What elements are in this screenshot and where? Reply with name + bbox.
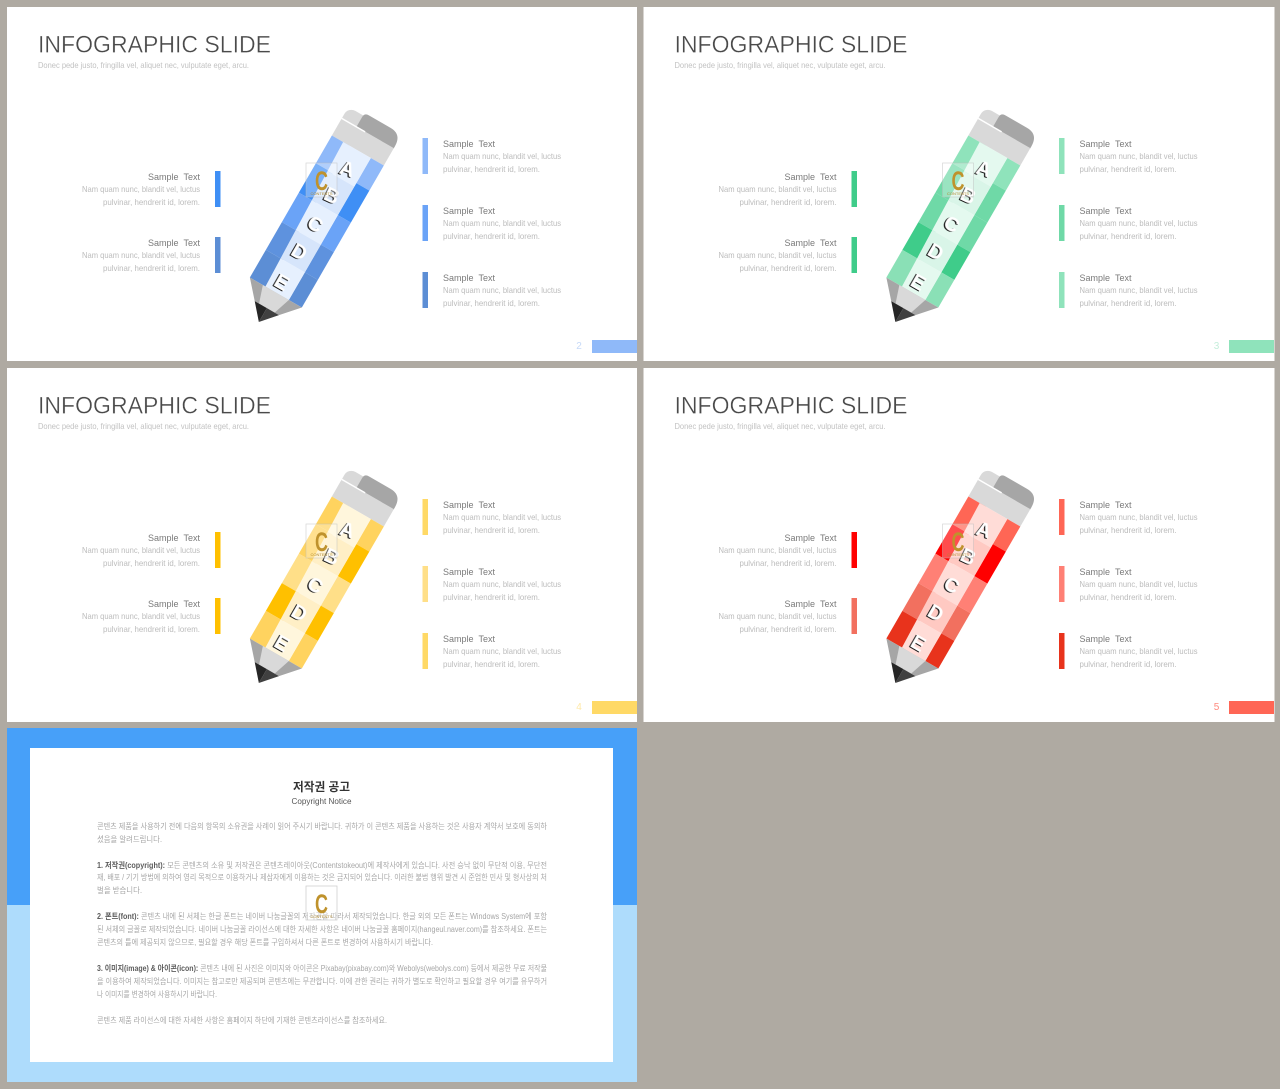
- left item 1: Nam quam nunc, blandit vel, luctus: [82, 545, 200, 555]
- right item 1: [422, 499, 561, 535]
- section 2 text: 2. 폰트(font): 콘텐츠 내에 된 서체는 한글 폰트는 네이버 나눔글꼴의 저작권을 따라서 제작되었습니다. 한글 외의 모든 폰트는 Windows System에 포함: [97, 911, 548, 921]
- right item 3: Nam quam nunc, blandit vel, luctus: [443, 285, 561, 295]
- right item 3: Sample Text: [443, 273, 495, 284]
- right item 3: [422, 272, 561, 308]
- left item 1: [718, 171, 857, 207]
- watermark logo: [306, 163, 337, 197]
- letters: D: [287, 240, 311, 266]
- section 1 text: 재, 배포 / 기기 방법에 의하여 영리 목적으로 이용하거나 제삼자에게 이용하는 것은 금지되어 있습니다. 이러한 불법 행위 발견 시 준엄한 민사 및 형사상의 처: [97, 872, 547, 882]
- left item 2: Nam quam nunc, blandit vel, luctus: [718, 250, 836, 260]
- right item 1: [1059, 138, 1198, 174]
- panel: copyright notice: [7, 728, 637, 1082]
- subheading: Copyright Notice: [292, 796, 352, 806]
- watermark logo: [942, 163, 974, 197]
- right item 2: pulvinar, hendrerit id, lorem.: [1080, 592, 1176, 602]
- left item 2: Sample Text: [148, 238, 200, 249]
- right item 2: Sample Text: [443, 206, 495, 217]
- panel: yellow slide: [7, 368, 637, 722]
- watermark logo: [306, 524, 337, 558]
- letters: [904, 515, 998, 658]
- right item 1: Nam quam nunc, blandit vel, luctus: [1080, 151, 1198, 161]
- left item 1: pulvinar, hendrerit id, lorem.: [103, 558, 200, 568]
- right item 1: Sample Text: [443, 139, 495, 150]
- letters: [268, 515, 361, 658]
- icon: pencil: [233, 104, 402, 337]
- section 1 text: 1. 저작권(copyright): 모든 콘텐츠의 소유 및 저작권은 콘텐츠레이아웃(Contentstokeout)에 제작사에게 있습니다. 사전 승낙 없이 무단적 이용, 무단전: [97, 860, 547, 870]
- heading: 저작권 공고: [293, 779, 350, 794]
- icon: pencil: [869, 104, 1038, 337]
- right item 3: pulvinar, hendrerit id, lorem.: [1080, 298, 1176, 308]
- watermark logo: CONTENTS: [947, 552, 969, 557]
- right item 3: Nam quam nunc, blandit vel, luctus: [443, 646, 561, 656]
- watermark logo: C: [315, 889, 328, 919]
- watermark logo: CONTENTS: [310, 914, 333, 919]
- left item 2: pulvinar, hendrerit id, lorem.: [103, 263, 200, 273]
- section 1 text: [97, 860, 547, 895]
- left item 2: [718, 237, 857, 273]
- letters: [904, 154, 998, 297]
- left item 1: pulvinar, hendrerit id, lorem.: [740, 197, 836, 207]
- panel: green slide: [644, 7, 1274, 361]
- panel: blue slide: [7, 7, 637, 361]
- right item 2: [422, 205, 561, 241]
- section 3 text: [97, 963, 547, 999]
- left item 1: Nam quam nunc, blandit vel, luctus: [718, 545, 836, 555]
- right item 2: pulvinar, hendrerit id, lorem.: [443, 231, 540, 241]
- intro text: 셨음을 알려드립니다.: [97, 834, 162, 844]
- left item 1: pulvinar, hendrerit id, lorem.: [740, 558, 836, 568]
- watermark logo: CONTENTS: [310, 552, 333, 557]
- subtitle: Donec pede justo, fringilla vel, aliquet nec, vulputate eget, arcu.: [674, 421, 886, 431]
- left item 1: pulvinar, hendrerit id, lorem.: [103, 197, 200, 207]
- right item 1: pulvinar, hendrerit id, lorem.: [1080, 525, 1176, 535]
- right item 3: Sample Text: [443, 634, 495, 645]
- right item 2: Nam quam nunc, blandit vel, luctus: [443, 579, 561, 589]
- page number: [576, 340, 637, 353]
- right item 1: [422, 138, 561, 174]
- letters: C: [940, 212, 963, 238]
- letters: E: [270, 270, 293, 296]
- right item 3: pulvinar, hendrerit id, lorem.: [443, 659, 540, 669]
- left item 2: Nam quam nunc, blandit vel, luctus: [82, 250, 200, 260]
- right item 1: Nam quam nunc, blandit vel, luctus: [443, 151, 561, 161]
- right item 2: Nam quam nunc, blandit vel, luctus: [443, 218, 561, 228]
- title: INFOGRAPHIC SLIDE: [38, 32, 271, 58]
- letters: B: [320, 544, 343, 570]
- left item 1: Sample Text: [784, 172, 837, 183]
- right item 2: Nam quam nunc, blandit vel, luctus: [1080, 218, 1198, 228]
- right item 2: Sample Text: [1080, 567, 1132, 578]
- letters: D: [287, 601, 311, 627]
- title: INFOGRAPHIC SLIDE: [674, 392, 908, 420]
- right item 3: Sample Text: [1080, 634, 1132, 645]
- section 2 text: [97, 911, 548, 947]
- section 3 text: 나 이미지를 변경하여 사용하시기 바랍니다.: [97, 989, 217, 999]
- page number: [1214, 701, 1274, 714]
- right item 1: Sample Text: [1080, 500, 1132, 511]
- left item 1: [82, 171, 220, 207]
- right item 2: Nam quam nunc, blandit vel, luctus: [1080, 579, 1198, 589]
- watermark logo: C: [952, 166, 964, 196]
- page number: [576, 701, 637, 714]
- right item 2: pulvinar, hendrerit id, lorem.: [443, 592, 540, 602]
- right item 2: [1059, 566, 1198, 602]
- watermark logo: CONTENTS: [310, 191, 333, 196]
- right item 3: Sample Text: [1080, 273, 1132, 284]
- left item 1: Nam quam nunc, blandit vel, luctus: [82, 184, 200, 194]
- right item 3: pulvinar, hendrerit id, lorem.: [1080, 659, 1176, 669]
- page number: [1214, 340, 1274, 353]
- left item 2: pulvinar, hendrerit id, lorem.: [740, 263, 836, 273]
- intro text: [97, 821, 548, 844]
- section 3 text: 을 이용하여 제작되었습니다. 이미지는 참고로만 제공되며 콘텐츠에는 무관합니다. 이에 관한 권리는 귀하가 별도로 확인하고 필요할 경우 여기를 유무하거: [97, 976, 547, 986]
- watermark logo: [306, 886, 337, 920]
- page number: 3: [1214, 341, 1220, 352]
- intro text: 콘텐츠 제품을 사용하기 전에 다음의 항목의 소유권을 사례이 읽어 주시기 바랍니다. 귀하가 이 콘텐츠 제품을 사용하는 것은 사용자 계약서 보호에 동의하: [97, 821, 548, 831]
- left item 2: pulvinar, hendrerit id, lorem.: [103, 624, 200, 634]
- letters: E: [907, 631, 929, 657]
- left item 2: Nam quam nunc, blandit vel, luctus: [82, 611, 200, 621]
- watermark logo: CONTENTS: [947, 191, 969, 196]
- title: INFOGRAPHIC SLIDE: [674, 32, 908, 58]
- watermark logo: C: [952, 527, 964, 557]
- letters: A: [337, 518, 357, 543]
- letters: B: [957, 544, 979, 570]
- right item 2: [422, 566, 561, 602]
- title: INFOGRAPHIC SLIDE: [38, 392, 271, 420]
- subtitle: Donec pede justo, fringilla vel, aliquet nec, vulputate eget, arcu.: [38, 60, 249, 70]
- right item 3: Nam quam nunc, blandit vel, luctus: [1080, 646, 1198, 656]
- letters: A: [973, 157, 994, 182]
- right item 2: Sample Text: [1080, 206, 1132, 217]
- right item 1: pulvinar, hendrerit id, lorem.: [443, 164, 540, 174]
- watermark logo: [942, 524, 974, 558]
- right item 1: Sample Text: [443, 500, 495, 511]
- section 2 text: 콘텐츠의 틀에 제공되지 않으므로, 필요할 경우 해당 폰트를 구입하셔서 다른 폰트로 변경하여 사용하시기 바랍니다.: [97, 937, 433, 947]
- left item 2: [82, 598, 220, 634]
- right item 2: pulvinar, hendrerit id, lorem.: [1080, 231, 1176, 241]
- panel: red slide: [644, 368, 1274, 722]
- letters: C: [303, 573, 327, 599]
- right item 1: pulvinar, hendrerit id, lorem.: [443, 525, 540, 535]
- section 2 text: 된 서체의 글꼴로 제작되었습니다. 네이버 나눔글꼴 라이선스에 대한 자세한 사항은 네이버 나눔글꼴 홈페이지(hangeul.naver.com)를 참조하세요. 폰트는: [97, 924, 547, 934]
- letters: C: [303, 212, 327, 238]
- right item 1: [1059, 499, 1198, 535]
- page number: 2: [576, 341, 582, 352]
- left item 2: [82, 237, 220, 273]
- right item 3: Nam quam nunc, blandit vel, luctus: [1080, 285, 1198, 295]
- right item 1: Nam quam nunc, blandit vel, luctus: [443, 512, 561, 522]
- left item 1: [82, 532, 220, 568]
- left item 2: [718, 598, 857, 634]
- letters: A: [973, 518, 994, 543]
- right item 2: [1059, 205, 1198, 241]
- letters: E: [270, 631, 293, 657]
- license note: 콘텐츠 제품 라이선스에 대한 자세한 사항은 홈페이지 하단에 기재한 콘텐츠라이선스를 참조하세요.: [97, 1015, 387, 1025]
- letters: D: [924, 601, 947, 627]
- left item 1: Nam quam nunc, blandit vel, luctus: [718, 184, 836, 194]
- subtitle: Donec pede justo, fringilla vel, aliquet nec, vulputate eget, arcu.: [38, 421, 249, 431]
- icon: pencil: [233, 465, 402, 698]
- left item 2: Sample Text: [784, 599, 837, 610]
- right item 3: [1059, 272, 1198, 308]
- left item 1: Sample Text: [784, 533, 837, 544]
- right item 3: [1059, 633, 1198, 669]
- page number: 4: [576, 702, 582, 713]
- left item 1: Sample Text: [148, 533, 200, 544]
- left item 2: Sample Text: [784, 238, 837, 249]
- section 1 text: 벌을 받습니다.: [97, 885, 142, 895]
- right item 1: Nam quam nunc, blandit vel, luctus: [1080, 512, 1198, 522]
- left item 2: Sample Text: [148, 599, 200, 610]
- right item 3: [422, 633, 561, 669]
- right item 3: pulvinar, hendrerit id, lorem.: [443, 298, 540, 308]
- left item 1: Sample Text: [148, 172, 200, 183]
- letters: E: [907, 270, 929, 296]
- letters: B: [320, 183, 343, 209]
- right item 1: pulvinar, hendrerit id, lorem.: [1080, 164, 1176, 174]
- left item 1: [718, 532, 857, 568]
- letters: B: [957, 183, 979, 209]
- right item 2: Sample Text: [443, 567, 495, 578]
- page number: 5: [1214, 702, 1220, 713]
- letters: [268, 154, 361, 297]
- letters: A: [337, 157, 357, 182]
- icon: pencil: [869, 465, 1038, 698]
- letters: C: [940, 573, 963, 599]
- left item 2: Nam quam nunc, blandit vel, luctus: [718, 611, 836, 621]
- watermark logo: C: [315, 527, 328, 557]
- watermark logo: C: [315, 166, 328, 196]
- letters: D: [924, 240, 947, 266]
- right item 1: Sample Text: [1080, 139, 1132, 150]
- left item 2: pulvinar, hendrerit id, lorem.: [740, 624, 836, 634]
- section 3 text: 3. 이미지(image) & 아이콘(icon): 콘텐츠 내에 된 사진은 이미지와 아이콘은 Pixabay(pixabay.com)와 Webolys(webolys.com) 등에서 제공한 무료 저작물: [97, 963, 547, 973]
- subtitle: Donec pede justo, fringilla vel, aliquet nec, vulputate eget, arcu.: [674, 60, 886, 70]
